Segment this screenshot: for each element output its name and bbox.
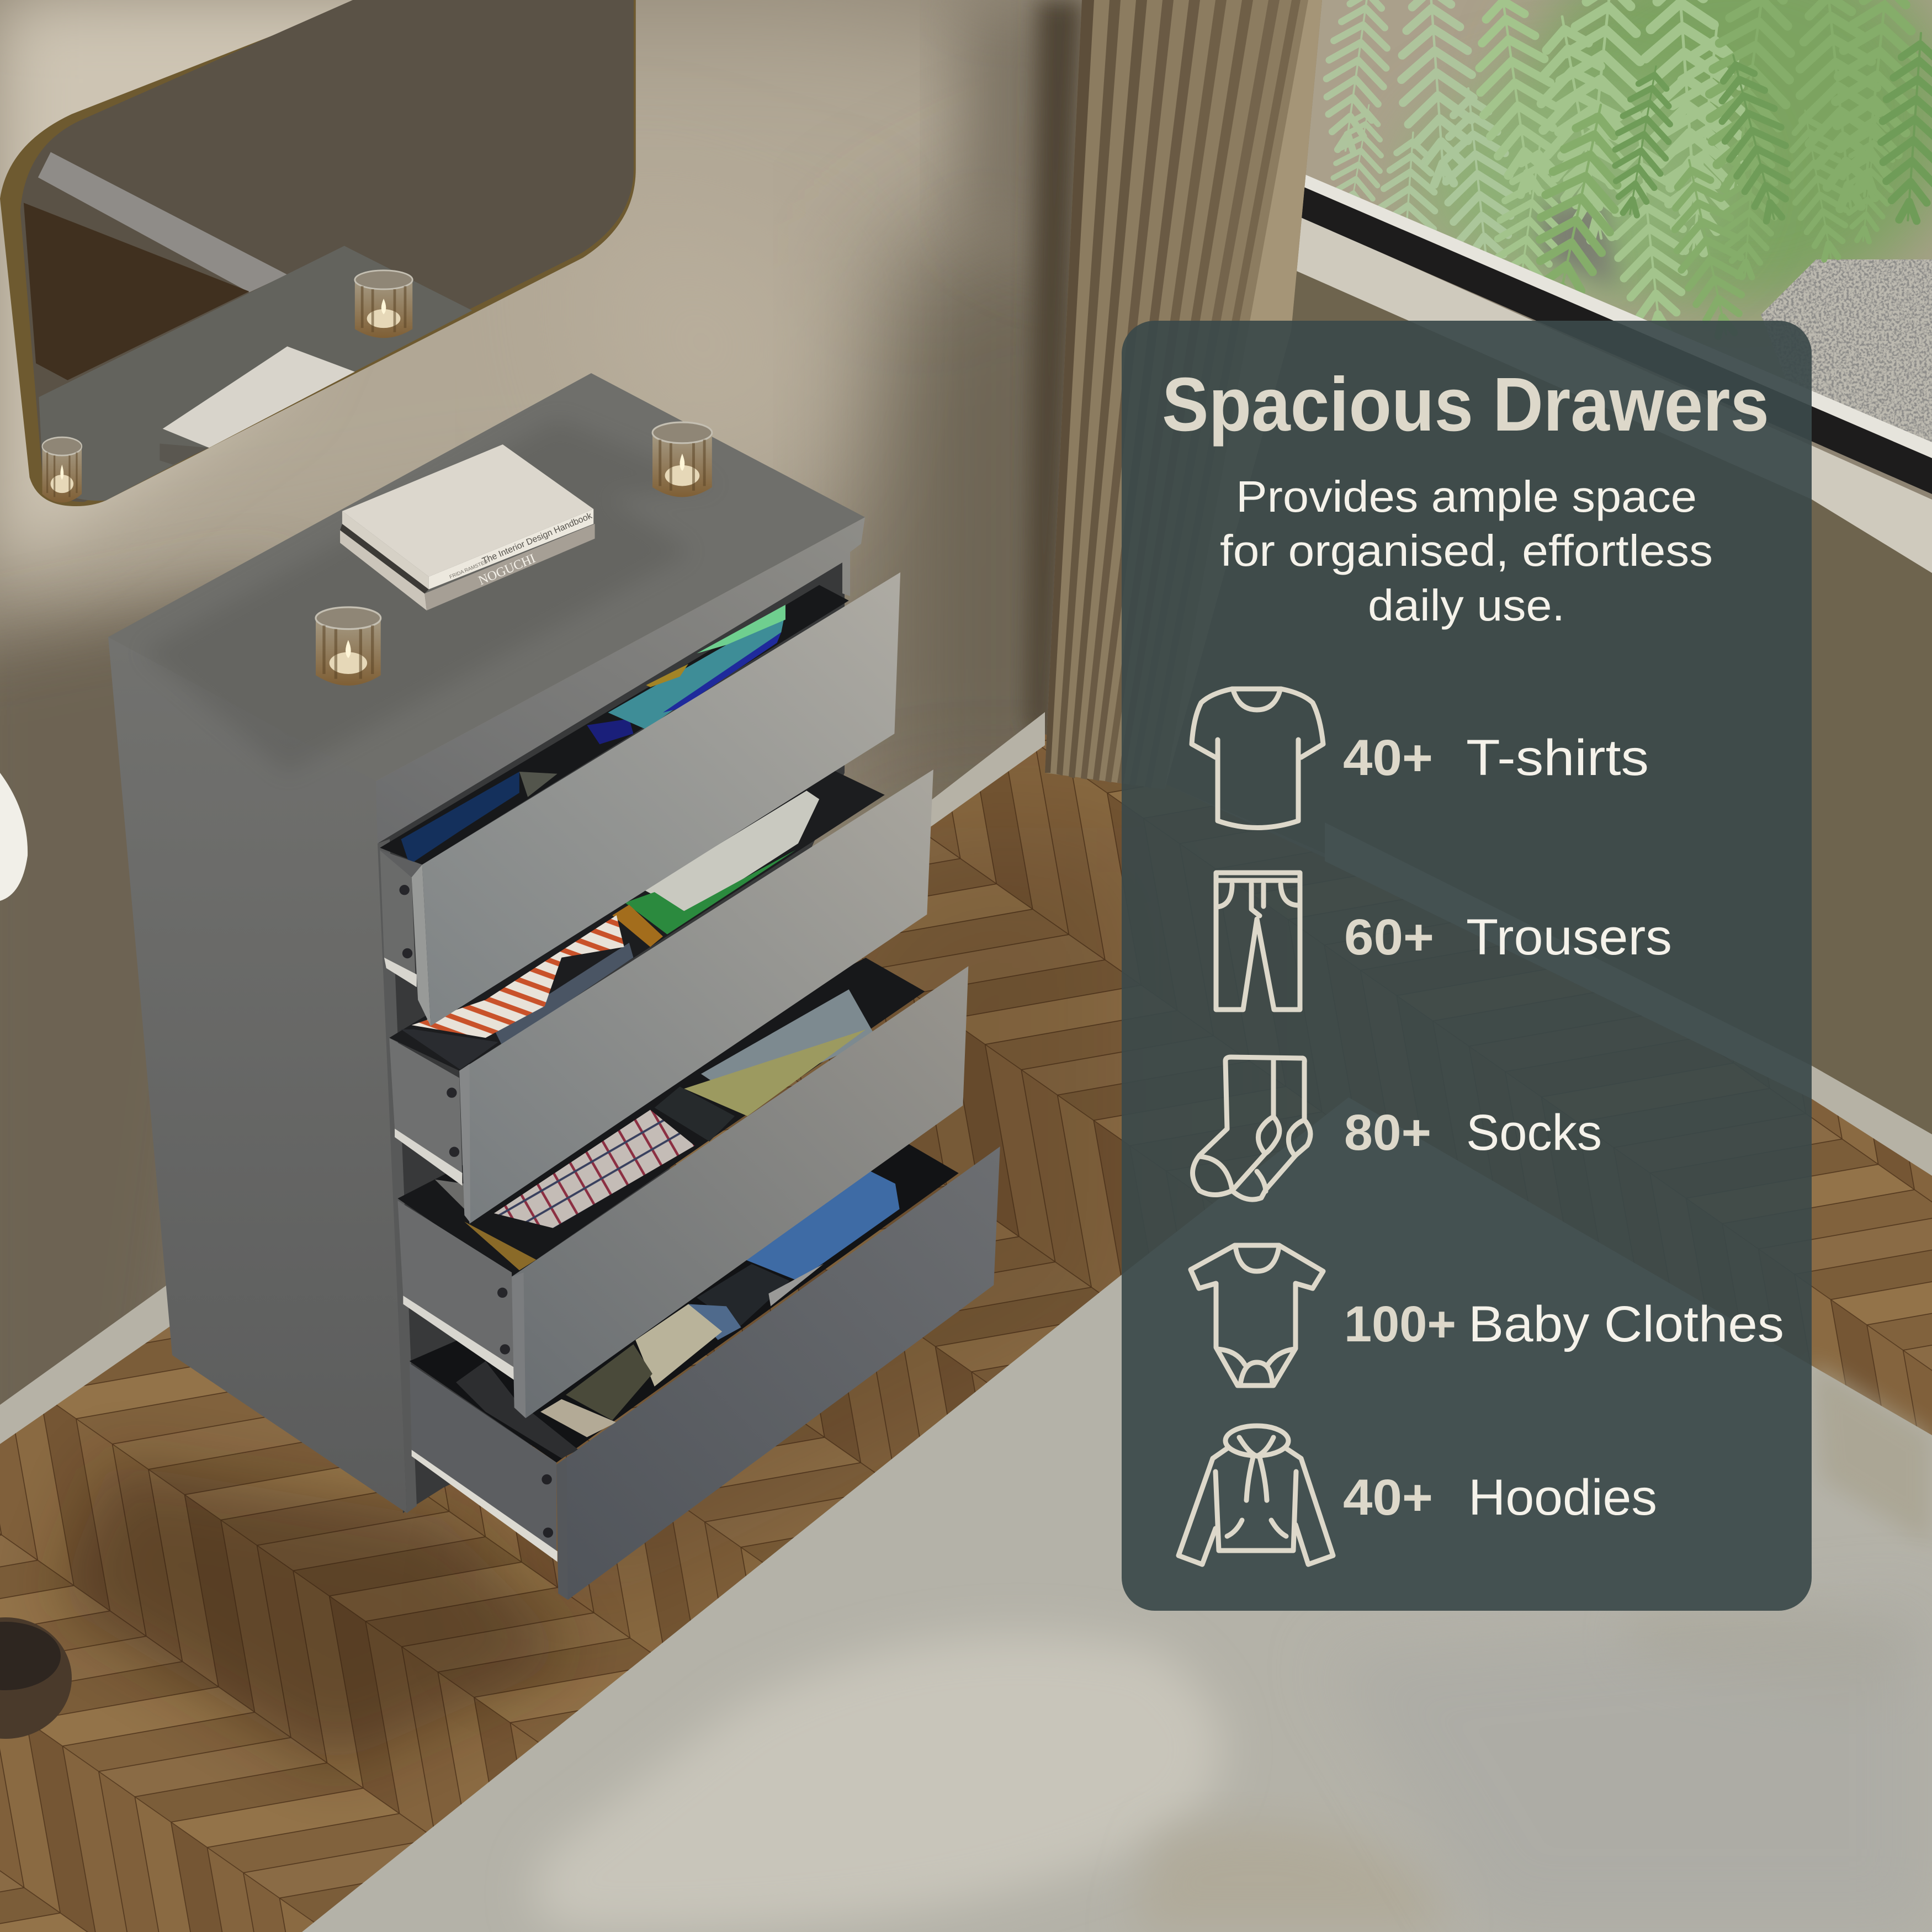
- row: 60+ trousers: 60+: [1344, 909, 1434, 965]
- row: 80+ socks: 80+: [1344, 1105, 1431, 1161]
- mirror: [0, 0, 636, 506]
- books on dresser: [340, 444, 595, 611]
- description: daily use.: [1368, 581, 1565, 630]
- carcass front edge: [378, 839, 417, 1513]
- title: Spacious Drawers: [1162, 362, 1769, 447]
- dresser top: [108, 373, 865, 781]
- description: Provides ample space: [1236, 472, 1697, 521]
- row: 40+ t-shirts: 40+: [1343, 730, 1433, 786]
- drawer 1: [379, 572, 900, 1026]
- rug: [302, 1097, 1932, 1932]
- row: 100+ baby clothes: [1344, 1296, 1784, 1352]
- window frame and sill: [1297, 174, 1932, 573]
- row: 40+ t-shirts: [1343, 730, 1649, 786]
- candle front: [316, 607, 381, 686]
- description: [1220, 472, 1713, 630]
- row: 100+ baby clothes: Baby Clothes: [1468, 1296, 1784, 1352]
- right wall: [1104, 271, 1932, 1134]
- curtain: [1045, 0, 1322, 789]
- drawer 2: [389, 769, 933, 1224]
- row: 60+ trousers: [1344, 909, 1672, 965]
- row: 100+ baby clothes: 100+: [1344, 1296, 1456, 1352]
- row: 40+ hoodies: 40+: [1343, 1469, 1433, 1526]
- books on dresser: NOGUCHI: [476, 551, 538, 588]
- books on dresser: FRIDA RAMSTEDT: [449, 558, 492, 580]
- dresser top front edge: [376, 517, 865, 843]
- dresser: [108, 373, 1000, 1600]
- translucent info panel: [1122, 321, 1812, 1611]
- books on dresser: The Interior Design Handbook: [481, 511, 594, 566]
- drawer 4: [410, 1144, 1000, 1600]
- lamp base: [0, 1617, 72, 1739]
- icon: t-shirt: [1192, 689, 1323, 828]
- lamp shade fragment: [0, 773, 28, 901]
- window view with foliage: [1303, 0, 1932, 453]
- shadow on dresser top: [144, 420, 718, 773]
- icon: hoodie: [1179, 1426, 1333, 1564]
- drawer 3: [397, 958, 968, 1418]
- candle right: [652, 422, 712, 497]
- icon: baby bodysuit: [1191, 1245, 1323, 1386]
- row: 40+ hoodies: [1343, 1469, 1657, 1526]
- row: 80+ socks: Socks: [1466, 1105, 1602, 1161]
- description: for organised, effortless: [1220, 526, 1713, 575]
- row: 40+ hoodies: Hoodies: [1468, 1469, 1657, 1526]
- icon: trousers: [1216, 873, 1300, 1010]
- baseboard left: [0, 712, 1045, 1444]
- dresser side panel: [108, 637, 407, 1513]
- row: 80+ socks: [1344, 1105, 1602, 1161]
- icon: socks: [1192, 1057, 1310, 1199]
- dresser carcass opening: [369, 546, 845, 1513]
- row: 40+ t-shirts: T-shirts: [1466, 730, 1649, 786]
- row: 60+ trousers: Trousers: [1466, 909, 1672, 965]
- wood herringbone floor: [0, 734, 1932, 1932]
- baseboard right: [1325, 822, 1932, 1176]
